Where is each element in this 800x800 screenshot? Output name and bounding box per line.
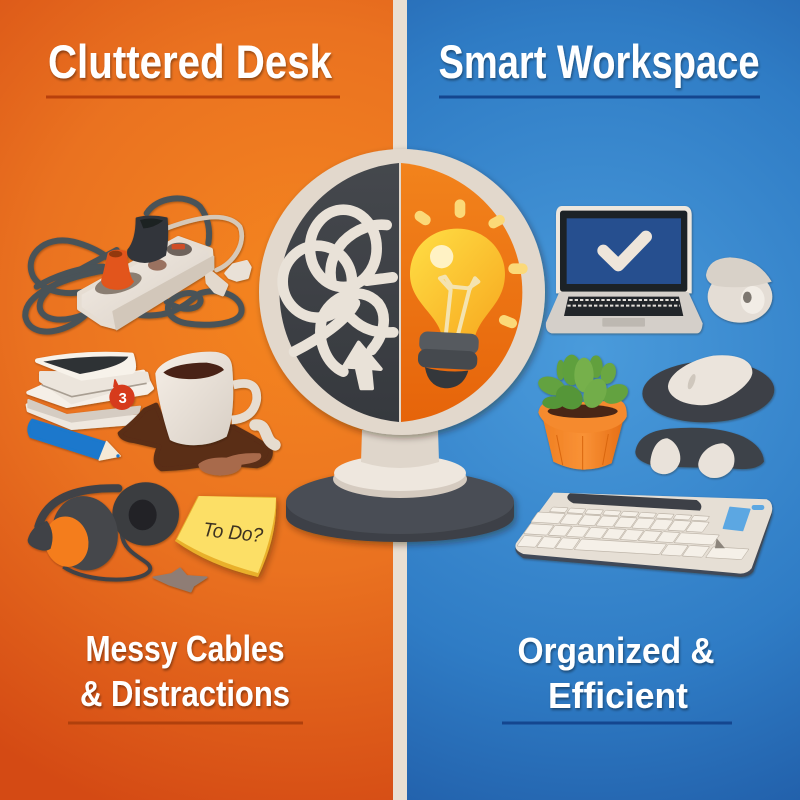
icon: stack of papers with notification badge: 3 bbox=[119, 391, 127, 407]
icon: wrist rest with earbuds bbox=[635, 428, 764, 478]
panel: orange left background bbox=[0, 0, 393, 800]
icon: cable organizer clip bbox=[706, 257, 772, 323]
caption: Organized and Efficient bbox=[518, 630, 714, 716]
centre divider strip bbox=[393, 0, 407, 800]
icon: laptop with check mark bbox=[546, 206, 703, 333]
icon: messy power strip with cables bbox=[25, 198, 250, 332]
left half: dark disc bbox=[279, 163, 399, 422]
caption: Messy Cables and Distractions bbox=[80, 628, 290, 714]
panel: blue right background bbox=[407, 0, 800, 800]
icon: headphones bbox=[28, 482, 207, 592]
icon: potted succulent bbox=[536, 355, 631, 470]
icon: central globe stand bbox=[259, 149, 545, 542]
icon: sticky note To Do?: To Do? bbox=[202, 519, 265, 547]
caption underline right bbox=[502, 722, 732, 724]
icon: mouse on mouse pad bbox=[641, 355, 775, 425]
icon: sticky note To Do? bbox=[175, 496, 276, 577]
disc outer ring bbox=[259, 149, 545, 435]
icon: coffee mug bbox=[155, 352, 257, 445]
icon: keyboard bbox=[514, 493, 772, 577]
cursor arrow bbox=[344, 343, 381, 388]
tangled cable knot bbox=[283, 210, 393, 388]
caption: Messy Cables and Distractions: & Distractions bbox=[80, 673, 290, 714]
caption: Messy Cables and Distractions: Messy Cables bbox=[86, 628, 284, 669]
icon: blue pencil bbox=[29, 420, 120, 460]
right half: orange disc bbox=[401, 163, 522, 422]
heading: Cluttered Desk: Cluttered Desk bbox=[48, 35, 333, 88]
caption: Organized and Efficient: Organized & bbox=[518, 630, 714, 671]
stand base bbox=[286, 470, 514, 542]
caption underline left bbox=[68, 722, 303, 724]
caption: Organized and Efficient: Efficient bbox=[548, 675, 688, 716]
stand collar and neck bbox=[333, 430, 467, 498]
icon: coffee spill bbox=[120, 405, 275, 474]
light bulb bbox=[410, 199, 528, 388]
icon: stack of papers with notification badge bbox=[27, 354, 152, 428]
